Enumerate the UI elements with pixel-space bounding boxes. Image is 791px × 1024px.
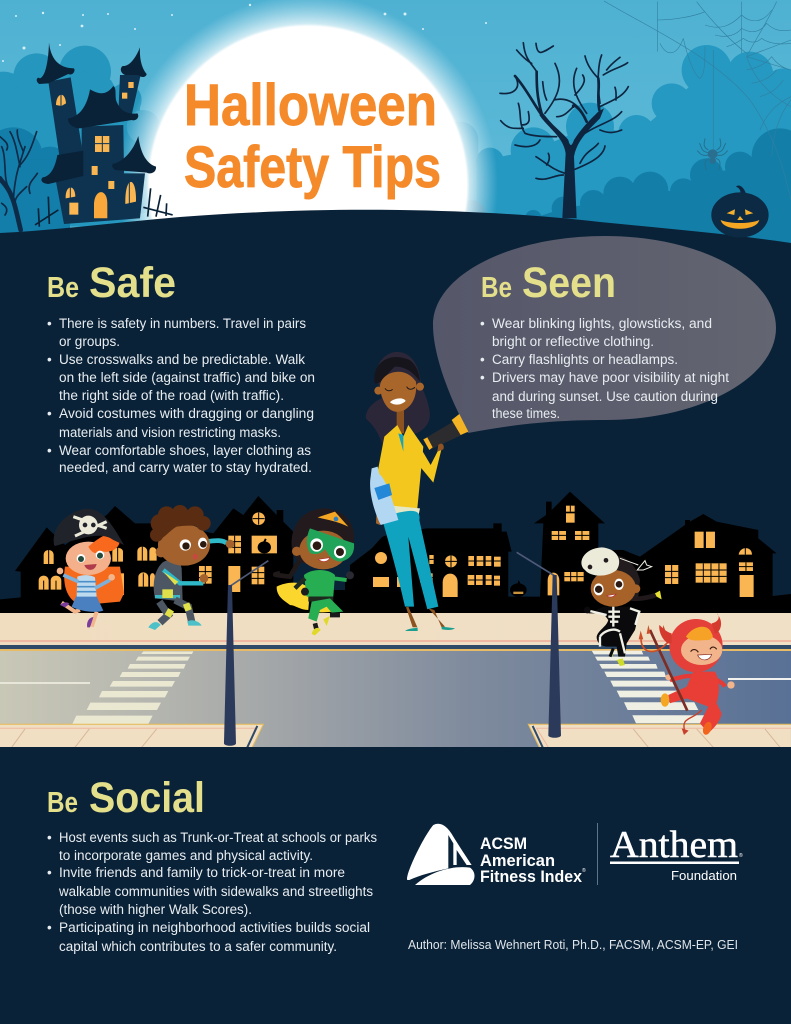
fences (35, 188, 173, 227)
sidewalk lower right (528, 724, 791, 747)
speech bubble: be seen (433, 236, 776, 433)
bullet list: be social: • (47, 830, 52, 845)
heading: be seen: Be (481, 272, 512, 304)
stars (2, 4, 487, 139)
section: be safe (47, 259, 315, 475)
bullet list: be safe: needed, and carry water to stay hydrated. (59, 460, 312, 475)
bullet list: be safe: Avoid costumes with dragging or dangling (59, 406, 314, 421)
bare tree left (0, 130, 37, 230)
carved pumpkin in window (258, 538, 271, 553)
title: Halloween (184, 73, 437, 138)
logo wordmark: ® (582, 867, 586, 874)
pumpkin (711, 186, 769, 238)
flashlight (423, 414, 468, 450)
bullet list: be safe: There is safety in numbers. Travel in pairs (59, 316, 306, 331)
bullet list: be social: • (47, 920, 52, 935)
heading: be social (47, 774, 205, 822)
heading: be social: Social (89, 774, 205, 822)
bullet list: be safe: Wear comfortable shoes, layer clothing as (59, 443, 311, 458)
logo: Anthem Foundation: Anthem (610, 824, 738, 866)
boy costume (148, 505, 234, 630)
title: Safety Tips (184, 135, 441, 200)
logo divider (597, 823, 598, 885)
bullet list: be seen: • (480, 316, 485, 331)
super girl costume (275, 508, 354, 635)
small pumpkin silhouette (510, 580, 527, 597)
logo: Anthem Foundation: Foundation (671, 869, 737, 883)
section: be seen (480, 259, 729, 421)
house silhouettes (0, 492, 791, 613)
logo wordmark: American (480, 851, 555, 870)
heading: be safe: Safe (89, 259, 176, 307)
bullet list: be seen: Carry flashlights or headlamps. (492, 352, 678, 367)
bullet list: be social: to incorporate games and physical activity. (59, 848, 313, 863)
lane marks (0, 682, 90, 684)
bullet list: be seen: • (480, 370, 485, 385)
moon (123, 0, 496, 222)
bullet list: be seen (480, 316, 729, 421)
logo wordmark: ACSM (480, 834, 527, 853)
bullet list: be social (47, 830, 377, 954)
woman with flashlight and water bottle (366, 352, 468, 631)
author credit: Author: Melissa Wehnert Roti, Ph.D., FACSM, ACSM-EP, GEI (408, 938, 738, 952)
bullet list: be safe: • (47, 316, 52, 331)
bullet list: be safe: on the left side (against traffic) and bike on (59, 370, 315, 385)
bullet list: be social: Host events such as Trunk-or-Treat at schools or parks (59, 830, 377, 845)
ground hill (0, 210, 791, 260)
title (184, 73, 441, 200)
crosswalk left (72, 651, 193, 724)
bullet list: be social: walkable communities with sidewalks and streetlights (58, 884, 373, 899)
bullet list: be safe: the right side of the road (with traffic). (59, 388, 284, 403)
heading: be seen: Seen (522, 259, 616, 307)
logo: Anthem Foundation: ® (739, 852, 743, 859)
pirate girl (54, 509, 124, 627)
bullet list: be social: Participating in neighborhood activities builds social (59, 920, 370, 935)
heading: be social: Be (47, 787, 78, 819)
bullet list: be safe: or groups. (59, 334, 120, 349)
sidewalk lower left (0, 724, 263, 747)
bullet list: be seen: Wear blinking lights, glowsticks, and (492, 316, 712, 331)
logo icon (407, 824, 474, 885)
bullet list: be seen: bright or reflective clothing. (492, 334, 654, 349)
lit windows: left (39, 512, 388, 595)
tower left (48, 77, 83, 160)
bullet list: be social: Invite friends and family to trick-or-treat in more (59, 865, 345, 880)
devil costume boy (639, 613, 735, 736)
bullet list: be safe: • (47, 352, 52, 367)
logo: Anthem Foundation (610, 824, 743, 883)
crosswalk right (592, 651, 710, 723)
lit windows: right (418, 506, 754, 597)
bullet list: be safe (47, 316, 315, 475)
water bottle (370, 467, 398, 525)
header scene: sky, moon, clouds (0, 0, 791, 243)
bullet list: be social: capital which contributes to a safer community. (59, 939, 337, 954)
street lamp left (224, 561, 268, 746)
central house (345, 528, 420, 613)
spider (697, 50, 728, 170)
bullet list: be seen: and during sunset. Use caution during (492, 389, 718, 404)
skeleton girl (581, 547, 662, 666)
logo wordmark (480, 834, 586, 886)
bullet list: be safe: Use crosswalks and be predictable. Walk (59, 352, 305, 367)
street scene (0, 352, 791, 749)
sidewalk upper (0, 613, 791, 645)
bullet list: be seen: • (480, 352, 485, 367)
section: be social (47, 774, 377, 954)
heading: be safe: Be (47, 272, 79, 304)
bullet list: be safe: • (47, 406, 52, 421)
bullet list: be safe: materials and vision restricting masks. (59, 425, 281, 440)
heading: be safe (47, 259, 176, 307)
clouds: left (0, 46, 160, 233)
clouds: right (442, 45, 791, 247)
haunted house (37, 43, 156, 224)
bullet list: be social: (those with higher Walk Scores). (59, 902, 252, 917)
bullet list: be safe: • (47, 443, 52, 458)
bare tree right (500, 43, 628, 218)
bullet list: be seen: these times. (492, 406, 560, 421)
bullet list: be seen: Drivers may have poor visibility at night (492, 370, 729, 385)
bullet list: be social: • (47, 865, 52, 880)
heading: be seen (481, 259, 616, 307)
cobweb and spider (604, 1, 791, 200)
road (0, 651, 791, 747)
logo: ACSM American Fitness Index (407, 824, 586, 886)
street lamp right (517, 552, 561, 738)
logo wordmark: Fitness Index (480, 867, 583, 886)
